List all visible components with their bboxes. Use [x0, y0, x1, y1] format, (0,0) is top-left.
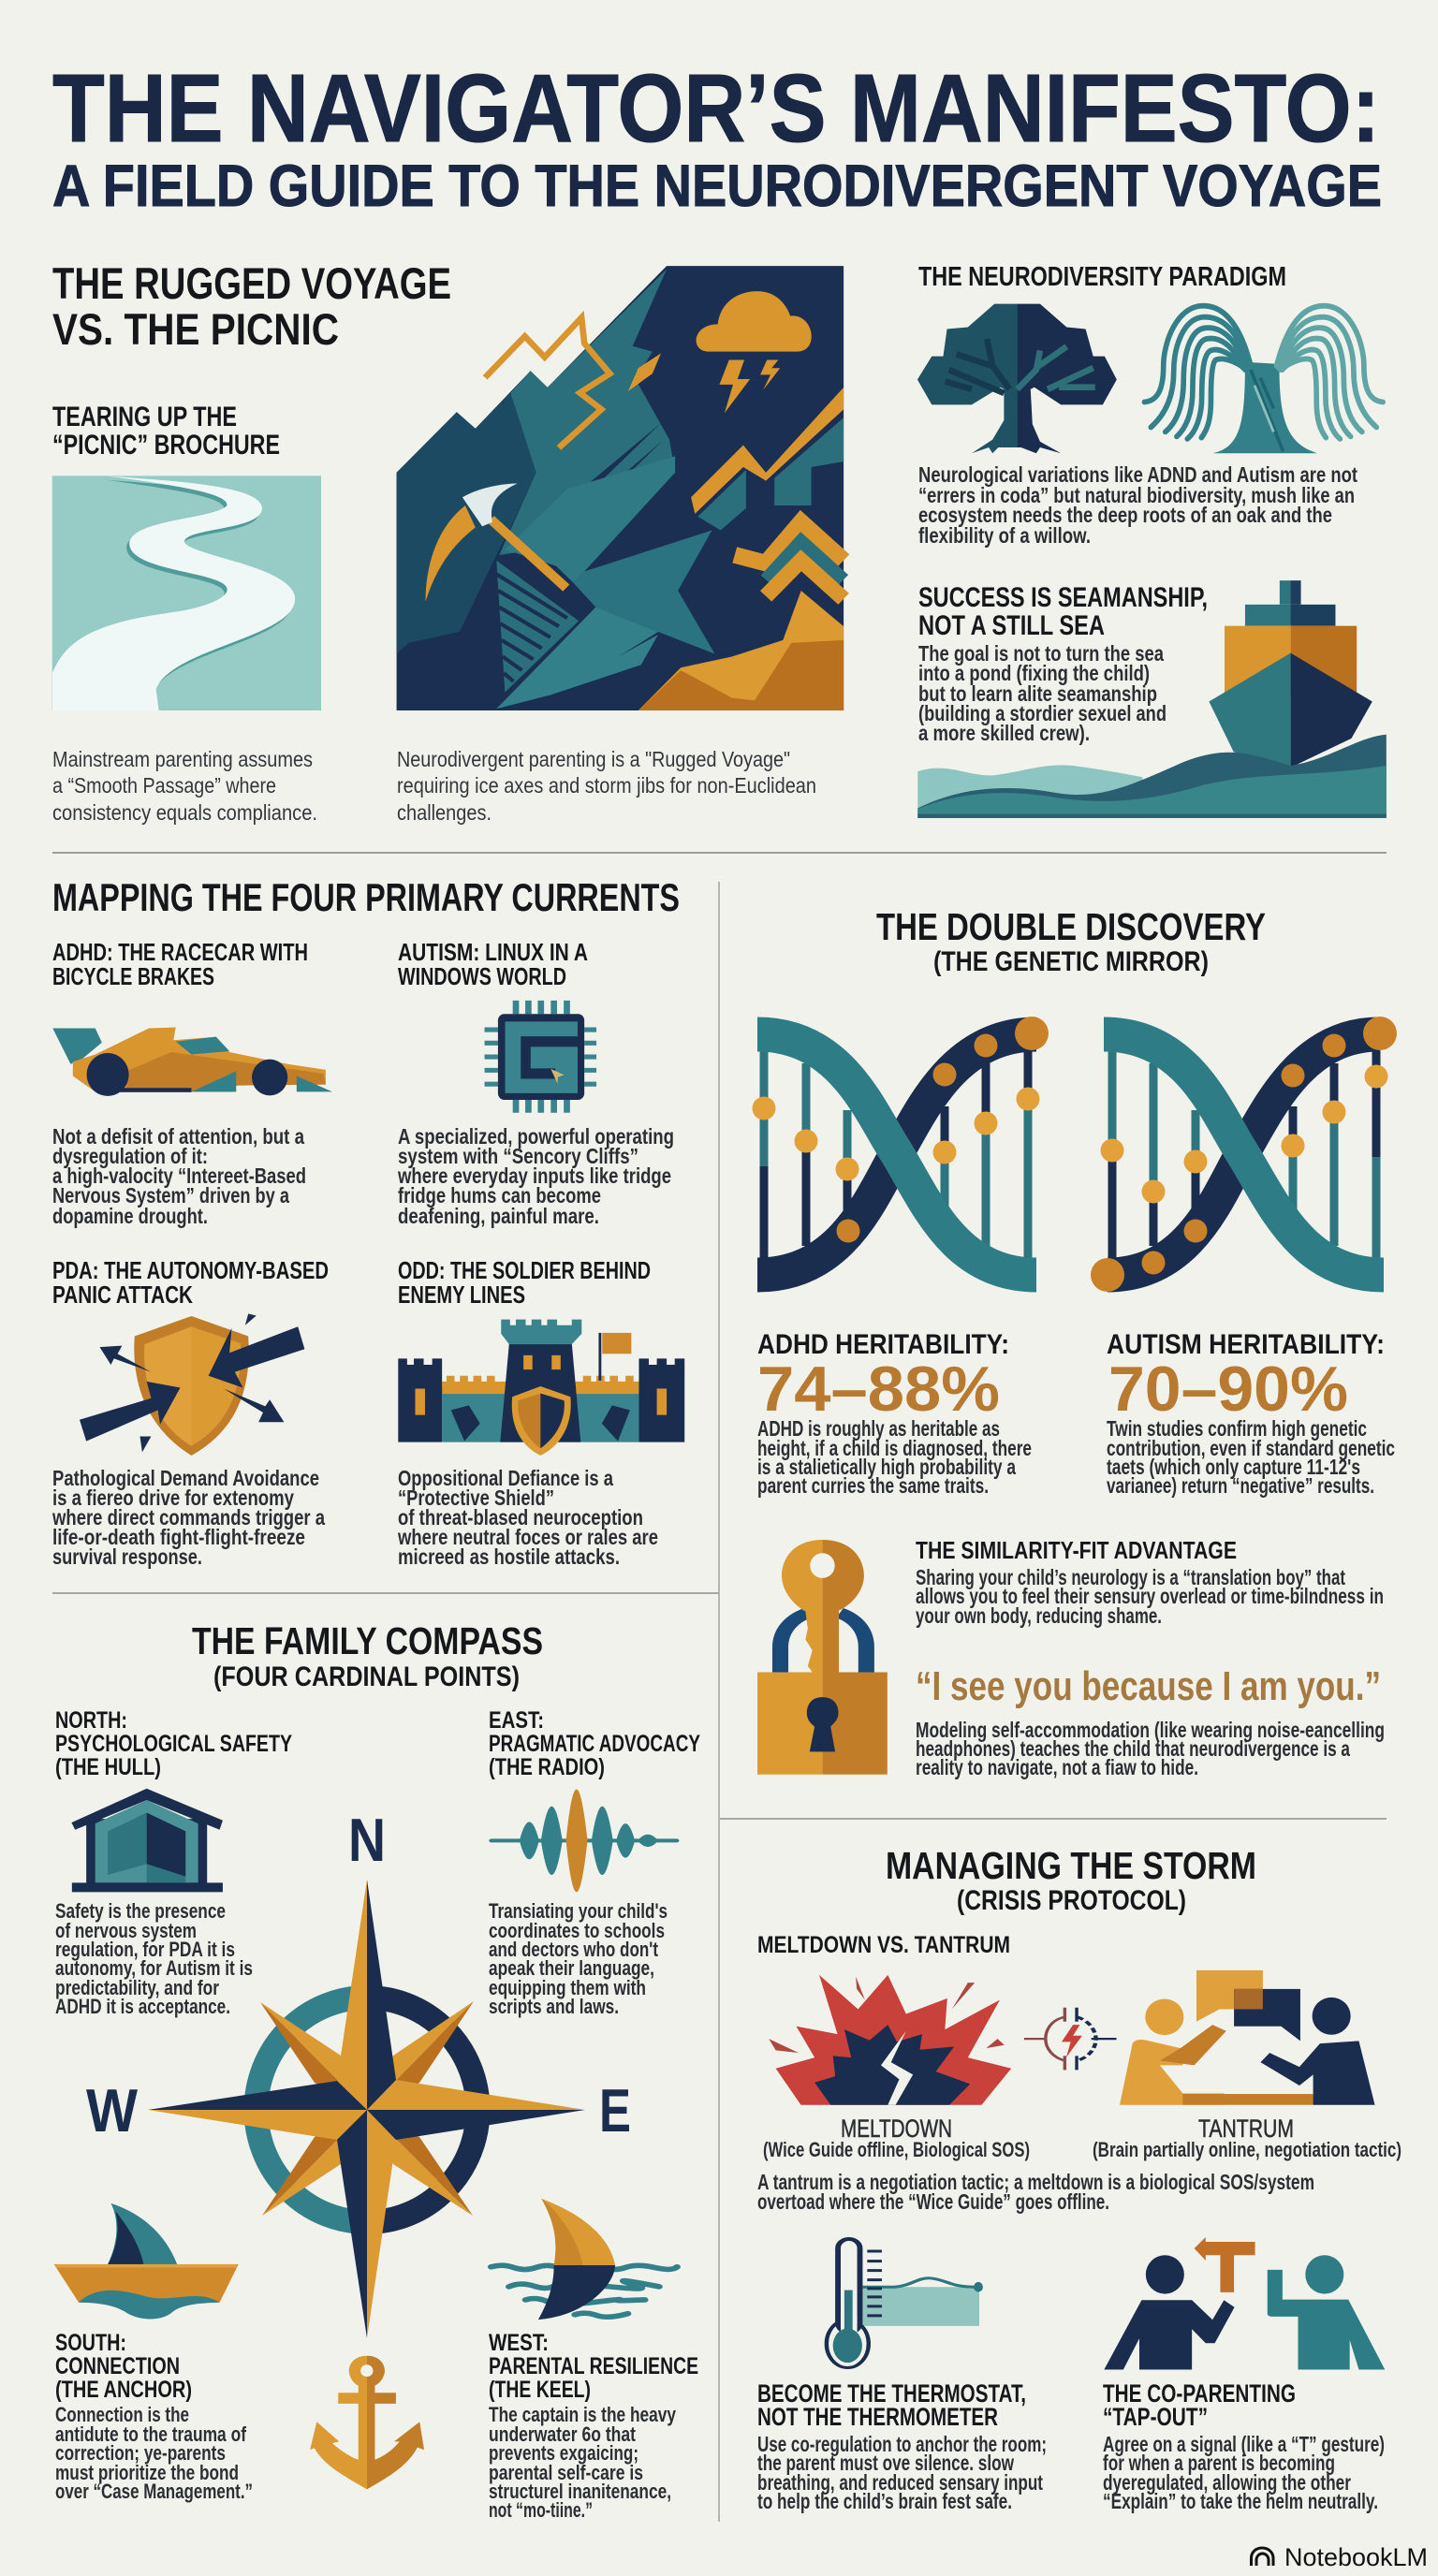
panel: mapping the four primary currents — [51, 875, 684, 1569]
subheading: autism: WINDOWS WORLD — [398, 962, 566, 990]
compass letter N: N — [348, 1806, 386, 1874]
text: south: antidute to the trauma of — [55, 2422, 247, 2446]
text: west: not “mo-tiine.” — [489, 2498, 593, 2522]
text: tantrum versus meltdown — [757, 2170, 1314, 2214]
icon: tantrum figures — [1120, 1970, 1375, 2105]
icon: willow tree — [1144, 306, 1383, 453]
icon: tap-out figures — [1104, 2237, 1385, 2369]
stat: ADHD heritability: is a stalietically high probability a — [757, 1455, 1016, 1479]
text: east: and dectors who don't — [489, 1938, 659, 1961]
illustration: stormy mountain with ice axe — [397, 266, 844, 710]
subheading: north: NORTH: — [55, 1707, 127, 1734]
subheading: south: CONNECTION — [55, 2353, 180, 2379]
text: south: correction; ye-parents — [55, 2441, 226, 2465]
heading: co-parenting: THE CO-PARENTING — [1103, 2379, 1296, 2408]
text: north — [55, 1899, 253, 2018]
text: autism: A specialized, powerful operating — [398, 1124, 674, 1149]
subheading: meltdown vs tantrum: MELTDOWN VS. TANTRUM — [757, 1932, 1010, 1958]
stat: autism heritability: AUTISM HERITABILITY: — [1107, 1329, 1385, 1360]
heading: mapping the four primary currents: MAPPING THE FOUR PRIMARY CURRENTS — [52, 875, 680, 919]
text: east: apeak their language, — [489, 1956, 654, 1980]
label: tantrum: TANTRUM — [1198, 2115, 1294, 2143]
text: neurodiversity description: flexibility of a willow. — [918, 523, 1091, 548]
icon: key in padlock — [757, 1540, 888, 1775]
card: west — [489, 2199, 698, 2522]
icon: castle with shield — [398, 1320, 684, 1456]
subheading: east: (THE RADIO) — [489, 1754, 605, 1780]
text: smooth passage: Mainstream parenting assumes — [52, 747, 313, 771]
divider: vertical column — [718, 882, 720, 2522]
icon: oak tree — [917, 304, 1117, 453]
text: seamanship description: (building a stordier sexuel and — [918, 701, 1167, 725]
subheading: ODD: ENEMY LINES — [398, 1281, 525, 1309]
icon: racecar — [52, 1027, 332, 1096]
subheading: ODD — [398, 1256, 651, 1309]
card: ODD — [397, 1256, 684, 1569]
text: ADHD: Nervous System” driven by a — [52, 1183, 289, 1208]
subheading: south: (THE ANCHOR) — [55, 2377, 192, 2403]
text: ODD — [397, 1466, 658, 1569]
text: ODD: micreed as hostile attacks. — [398, 1544, 620, 1569]
label: meltdown: (Wice Guide offline, Biological SOS) — [763, 2138, 1030, 2161]
text: south: over “Case Management.” — [55, 2480, 253, 2503]
text: smooth passage — [52, 747, 317, 825]
text: ODD: “Protective Shield” — [398, 1486, 554, 1510]
stat: ADHD heritability: 74–88% — [757, 1354, 1000, 1425]
text: south: Connection is the — [55, 2403, 189, 2426]
subheading: west: PARENTAL RESILIENCE — [489, 2353, 698, 2379]
heading: family compass — [192, 1619, 543, 1692]
text: thermostat: Use co-regulation to anchor the room; — [757, 2432, 1047, 2456]
text: east: scripts and laws. — [489, 1995, 619, 2018]
text: seamanship description — [918, 641, 1167, 745]
heading: rugged voyage: VS. THE PICNIC — [52, 304, 339, 354]
text: south — [55, 2403, 253, 2503]
text: PDA: Pathological Demand Avoidance — [52, 1466, 319, 1490]
label: meltdown — [763, 2115, 1030, 2161]
icon: ship on waves — [917, 580, 1387, 818]
stat: autism heritability: 70–90% — [1108, 1354, 1348, 1425]
text: ODD: of threat-blased neuroception — [398, 1505, 643, 1530]
heading: co-parenting: “TAP-OUT” — [1103, 2403, 1208, 2431]
text: autism: deafening, painful mare. — [398, 1204, 599, 1228]
heading: managing the storm — [886, 1844, 1256, 1916]
text: thermostat: to help the child’s brain fest safe. — [757, 2489, 1012, 2513]
text: co-parenting: for when a parent is becoming — [1103, 2451, 1335, 2475]
text: autism: system with “Sencory Cliffs” — [398, 1144, 638, 1168]
panel: success is seamanship — [917, 580, 1387, 818]
text: west — [489, 2403, 677, 2522]
text: east: coordinates to schools — [489, 1919, 665, 1942]
text: rugged voyage: Neurodivergent parenting is a "Rugged Voyage" — [397, 747, 790, 771]
text: co-parenting — [1103, 2432, 1385, 2513]
brand: NotebookLM: NotebookLM — [1284, 2543, 1428, 2571]
subheading: PDA: PANIC ATTACK — [52, 1281, 193, 1309]
heading: rugged voyage: THE RUGGED VOYAGE — [52, 258, 451, 308]
subheading: east: PRAGMATIC ADVOCACY — [489, 1731, 700, 1757]
heading: thermostat: BECOME THE THERMOSTAT, — [757, 2379, 1026, 2408]
card: east — [489, 1707, 700, 2018]
subheading: PDA — [52, 1256, 329, 1309]
subheading: east — [489, 1707, 700, 1780]
text: north: ADHD it is acceptance. — [55, 1995, 230, 2018]
text: neurodiversity description — [918, 462, 1357, 548]
divider: upper section — [52, 852, 1387, 854]
text: east: equipping them with — [489, 1976, 646, 1999]
subheading: autism — [398, 938, 588, 990]
panel: the rugged voyage vs the picnic — [52, 258, 844, 825]
text: rugged voyage — [397, 747, 816, 825]
stat: ADHD heritability — [757, 1329, 1032, 1498]
text: seamanship description: The goal is not to turn the sea — [918, 641, 1164, 666]
subheading: tearing up the brochure: TEARING UP THE — [52, 402, 237, 432]
subheading: autism: AUTISM: LINUX IN A — [398, 938, 588, 966]
text: south: must prioritize the bond — [55, 2461, 239, 2484]
subheading: PDA: PDA: THE AUTONOMY-BASED — [52, 1256, 329, 1284]
subheading: north: (THE HULL) — [55, 1754, 161, 1780]
text: west: parental self-care is — [489, 2461, 643, 2484]
text: north: of nervous system — [55, 1919, 197, 1942]
subheading: tearing up the brochure — [52, 402, 280, 461]
text: north: regulation, for PDA it is — [55, 1938, 235, 1961]
text: co-parenting: dyeregulated, allowing the other — [1103, 2470, 1351, 2495]
text: west: prevents exgaicing; — [489, 2441, 638, 2465]
text: seamanship description: a more skilled crew). — [918, 721, 1090, 745]
text: west: underwater 6o that — [489, 2422, 637, 2446]
illustration: smooth river — [52, 473, 321, 710]
block: similarity-fit advantage — [757, 1536, 1385, 1779]
subheading: ODD: ODD: THE SOLDIER BEHIND — [398, 1256, 651, 1284]
divider: mapping and compass — [52, 1592, 719, 1594]
heading: double discovery — [876, 905, 1266, 977]
subheading: west — [489, 2330, 698, 2403]
icon: meltdown explosion — [769, 1975, 1011, 2105]
icon: microchip — [485, 1001, 596, 1113]
divider: similarity and storm — [720, 1818, 1387, 1820]
text: autism: where everyday inputs like tridge — [397, 1164, 671, 1188]
text: rugged voyage: challenges. — [397, 800, 492, 825]
subheading: east: EAST: — [489, 1707, 544, 1734]
stat: ADHD heritability: height, if a child is diagnosed, there — [757, 1436, 1032, 1460]
text: smooth passage: consistency equals compliance. — [52, 800, 317, 825]
text: north: autonomy, for Autism it is — [55, 1956, 253, 1980]
panel: managing the storm — [757, 1844, 1401, 2513]
subheading: south: SOUTH: — [55, 2330, 126, 2356]
label: meltdown: MELTDOWN — [841, 2115, 952, 2143]
chart icon: ADHD DNA helix — [753, 1017, 1049, 1275]
text: self-accommodation: reality to navigate, not a fiaw to hide. — [916, 1755, 1198, 1779]
subheading: ADHD — [52, 938, 308, 990]
text: thermostat — [757, 2432, 1047, 2513]
heading: family compass: THE FAMILY COMPASS — [192, 1619, 543, 1662]
compass rose — [148, 1880, 585, 2338]
heading: co-parenting — [1103, 2379, 1296, 2431]
card: autism — [397, 938, 674, 1228]
stat: ADHD heritability: ADHD HERITABILITY: — [757, 1329, 1009, 1360]
text: PDA: where direct commands trigger a — [51, 1505, 325, 1530]
text: ADHD: Not a defisit of attention, but a — [52, 1124, 304, 1149]
card: co-parenting tap-out — [1103, 2237, 1385, 2513]
text: west: structurel inanitenance, — [489, 2480, 671, 2503]
text: PDA: life-or-death fight-flight-freeze — [52, 1525, 305, 1549]
icon: house hull — [71, 1789, 223, 1892]
heading: double discovery: (THE GENETIC MIRROR) — [933, 946, 1209, 977]
text: self-accommodation — [916, 1718, 1385, 1779]
text: thermostat: breathing, and reduced sensary input — [757, 2470, 1043, 2495]
subheading: north — [55, 1707, 292, 1780]
text: autism: fridge hums can become — [398, 1183, 601, 1208]
icon: sailboat keel — [492, 2199, 677, 2320]
icon: radio waveform — [489, 1789, 679, 1892]
text: PDA: survival response. — [52, 1544, 202, 1569]
icon: boat — [54, 2203, 239, 2320]
chart icon: autism DNA helix — [1091, 1017, 1397, 1292]
text: north: Safety is the presence — [55, 1899, 226, 1923]
text: seamanship description: but to learn alite seamanship — [918, 681, 1157, 706]
heading: family compass: (FOUR CARDINAL POINTS) — [213, 1661, 520, 1692]
subheading: ADHD: ADHD: THE RACECAR WITH — [52, 938, 308, 966]
text: ADHD: dopamine drought. — [52, 1204, 208, 1228]
card: ADHD — [52, 938, 332, 1228]
icon: thermometer — [827, 2239, 983, 2367]
text: north: predictability, and for — [55, 1976, 219, 1999]
text: rugged voyage: requiring ice axes and storm jibs for non-Euclidean — [397, 773, 816, 798]
text: translation key — [916, 1565, 1384, 1628]
card: south — [54, 2203, 253, 2503]
compass letter E: E — [599, 2076, 631, 2144]
text: smooth passage: a “Smooth Passage” where — [52, 773, 276, 798]
text: neurodiversity description: ecosystem needs the deep roots of an oak and the — [918, 503, 1332, 527]
heading: managing the storm: (CRISIS PROTOCOL) — [957, 1885, 1186, 1916]
stat: autism heritability — [1107, 1329, 1395, 1498]
heading: success is seamanship: NOT A STILL SEA — [918, 610, 1105, 641]
text: ADHD — [52, 1124, 306, 1228]
title — [52, 54, 1382, 219]
text: east — [489, 1899, 668, 2018]
subheading: west: (THE KEEL) — [489, 2377, 591, 2403]
card: north — [55, 1707, 292, 2018]
heading: thermostat: NOT THE THERMOMETER — [757, 2403, 998, 2431]
panel: neurodiversity paradigm — [917, 262, 1383, 548]
label: tantrum — [1093, 2115, 1401, 2161]
heading: rugged voyage — [52, 258, 451, 354]
heading: double discovery: THE DOUBLE DISCOVERY — [876, 905, 1266, 948]
text: east: Transiating your child's — [489, 1899, 668, 1923]
icon: shield under arrows — [80, 1313, 304, 1456]
heading: managing the storm: MANAGING THE STORM — [886, 1844, 1256, 1887]
heading: thermostat — [757, 2379, 1026, 2431]
compass letter W: W — [86, 2076, 139, 2144]
text: PDA: is a fiereo drive for extenomy — [52, 1486, 294, 1510]
text: translation key: your own body, reducing shame. — [916, 1603, 1162, 1628]
text: seamanship description: into a pond (fixing the child) — [918, 661, 1150, 685]
panel: double discovery — [753, 905, 1397, 1779]
text: autism — [397, 1124, 674, 1228]
text: ODD: Oppositional Defiance is a — [398, 1466, 613, 1490]
subheading: north: PSYCHOLOGICAL SAFETY — [55, 1731, 292, 1757]
card: thermostat — [757, 2239, 1047, 2513]
subheading: ADHD: BICYCLE BRAKES — [52, 962, 214, 990]
text: ADHD: dysregulation of it: — [52, 1144, 208, 1168]
text: west: The captain is the heavy — [489, 2403, 677, 2426]
icon: anchor — [310, 2356, 424, 2489]
text: tantrum versus meltdown: overtoad where the “Wice Guide” goes offline. — [757, 2189, 1109, 2214]
icon: versus gauge — [1024, 2008, 1117, 2070]
card: PDA — [51, 1256, 329, 1569]
heading: success is seamanship — [918, 582, 1208, 641]
panel: family compass — [54, 1619, 700, 2522]
text: thermostat: the parent must ove silence. slow — [757, 2451, 1014, 2475]
stat: ADHD heritability: ADHD is roughly as heritable as — [757, 1416, 1000, 1441]
heading: success is seamanship: SUCCESS IS SEAMANSHIP, — [918, 582, 1208, 613]
heading: neurodiversity paradigm: THE NEURODIVERSITY PARADIGM — [918, 262, 1286, 292]
subheading: south — [55, 2330, 192, 2403]
subheading: west: WEST: — [489, 2330, 549, 2356]
text: PDA — [51, 1466, 325, 1569]
text: ADHD: a high-valocity “Intereet-Based — [52, 1164, 306, 1188]
stat: ADHD heritability: parent curries the same traits. — [757, 1473, 989, 1498]
stat: autism heritability: taets (which only capture 11-12's — [1107, 1455, 1360, 1479]
heading: similarity-fit advantage: THE SIMILARITY-FIT ADVANTAGE — [916, 1536, 1237, 1564]
text: ODD: where neutral foces or rales are — [397, 1525, 658, 1549]
subheading: tearing up the brochure: “PICNIC” BROCHURE — [52, 430, 280, 461]
